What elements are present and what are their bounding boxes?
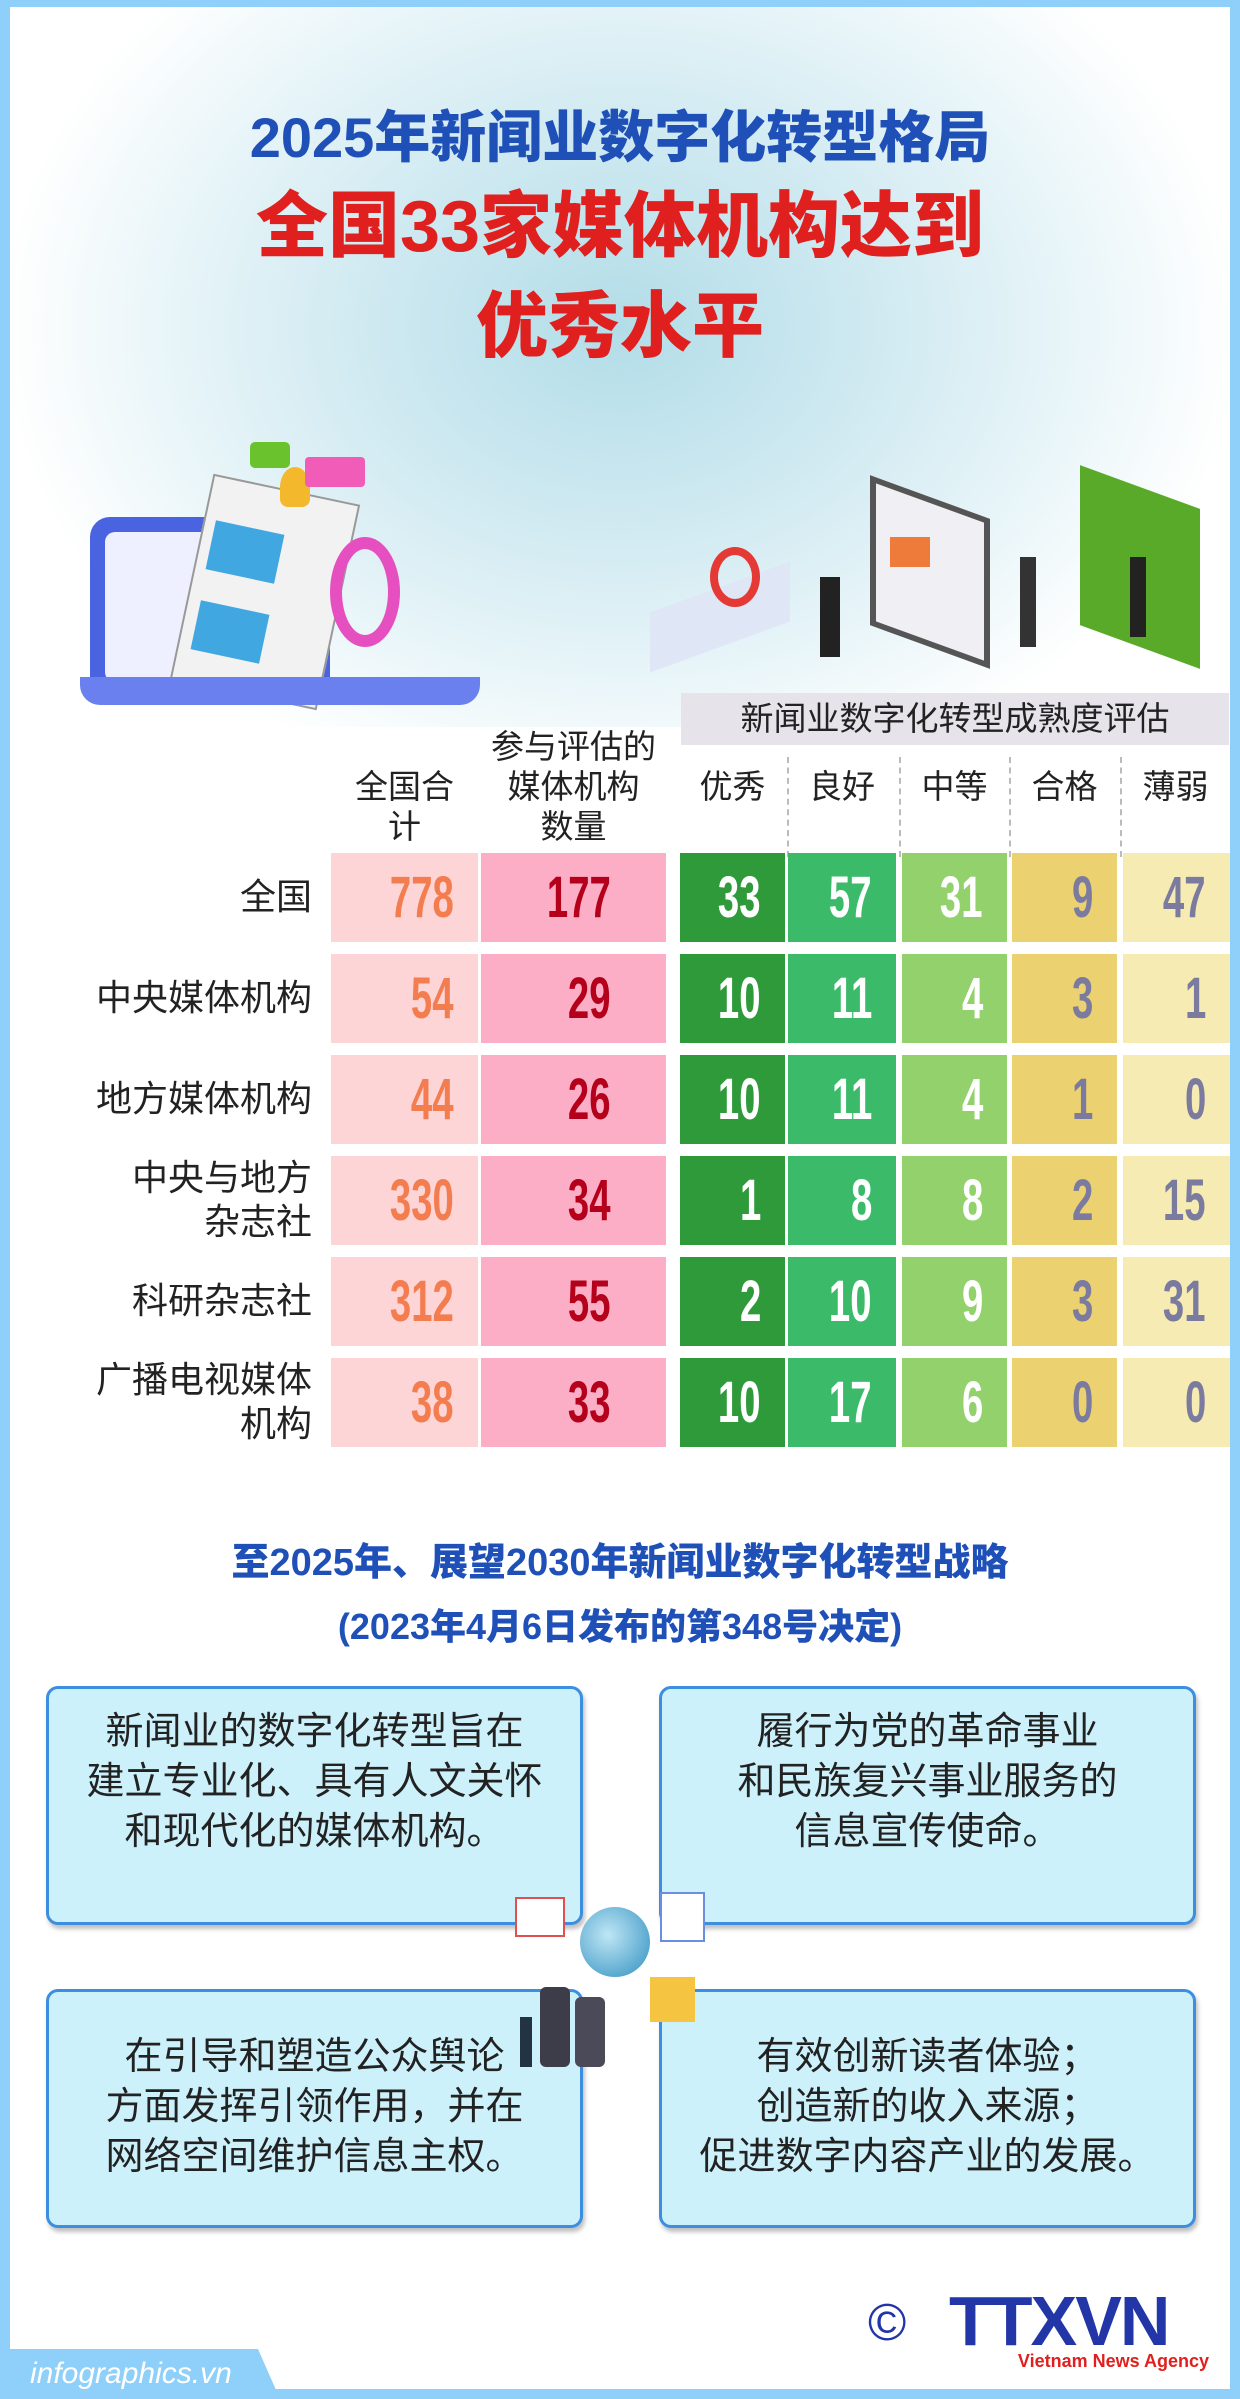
row: 广播电视媒体机构: 0 <box>1072 1370 1093 1435</box>
row: 科研杂志社: 55 <box>568 1269 611 1334</box>
column headers <box>355 728 1208 857</box>
row: 科研杂志社: 2 <box>740 1269 761 1334</box>
row: 广播电视媒体机构: 广播电视媒体 <box>96 1359 312 1400</box>
row: 中央与地方杂志社: 1 <box>740 1168 761 1233</box>
row: 广播电视媒体机构: 33 <box>568 1370 611 1435</box>
title line 2: 全国33家媒体机构达到 <box>256 187 984 267</box>
column headers: 合格 <box>1032 768 1098 805</box>
box: goal 3: 方面发挥引领作用，并在 <box>105 2086 524 2128</box>
row: 中央媒体机构: 10 <box>718 966 761 1031</box>
box: goal 4 <box>659 1989 1196 2228</box>
logo: TTXVN: Vietnam News Agency <box>1018 2351 1209 2371</box>
column headers: 优秀 <box>700 768 766 805</box>
column headers: 数量 <box>540 808 606 845</box>
title line 1: 2025年新闻业数字化转型格局 <box>250 106 990 169</box>
row: 中央与地方杂志社: 34 <box>568 1168 611 1233</box>
row: 全国: 47 <box>1163 865 1206 930</box>
box: goal 1: 和现代化的媒体机构。 <box>124 1811 504 1853</box>
column headers: 媒体机构 <box>508 768 640 805</box>
box: goal 1 <box>46 1686 583 1925</box>
box: goal 4: 促进数字内容产业的发展。 <box>699 2136 1156 2178</box>
data table <box>96 853 1230 1447</box>
row: 全国: 778 <box>390 865 454 930</box>
row: 科研杂志社 <box>132 1257 1230 1346</box>
box: goal 2: 信息宣传使命。 <box>794 1811 1060 1853</box>
row: 全国: 57 <box>829 865 872 930</box>
row: 科研杂志社: 312 <box>390 1269 454 1334</box>
row: 全国 <box>240 853 1230 942</box>
icon: digital globe and servers <box>515 1892 705 2067</box>
row: 地方媒体机构: 10 <box>718 1067 761 1132</box>
row: 广播电视媒体机构: 0 <box>1185 1370 1206 1435</box>
column headers: 良好 <box>809 768 875 805</box>
row: 地方媒体机构 <box>96 1055 1230 1144</box>
row: 全国: 177 <box>547 865 611 930</box>
row: 科研杂志社: 3 <box>1072 1269 1093 1334</box>
row: 中央媒体机构: 11 <box>832 966 872 1031</box>
row: 广播电视媒体机构: 38 <box>411 1370 454 1435</box>
row: 中央媒体机构 <box>96 954 1230 1043</box>
row: 中央媒体机构: 中央媒体机构 <box>96 977 312 1018</box>
row: 广播电视媒体机构: 17 <box>829 1370 872 1435</box>
box: goal 2: 履行为党的革命事业 <box>756 1711 1098 1753</box>
logo: copyright symbol: © <box>868 2294 906 2352</box>
column headers: 计 <box>388 808 421 845</box>
row: 广播电视媒体机构: 6 <box>962 1370 983 1435</box>
box: goal 4: 有效创新读者体验； <box>756 2036 1098 2078</box>
strategy subheading: (2023年4月6日发布的第348号决定) <box>338 1606 902 1647</box>
row: 中央与地方杂志社 <box>132 1156 1230 1245</box>
illustration: newsroom people <box>650 465 1200 672</box>
row: 中央与地方杂志社: 2 <box>1072 1168 1093 1233</box>
illustration: laptop with newspaper and megaphone <box>80 442 480 710</box>
row: 中央与地方杂志社: 中央与地方 <box>132 1157 312 1198</box>
row: 地方媒体机构: 4 <box>962 1067 983 1132</box>
row: 地方媒体机构: 1 <box>1072 1067 1093 1132</box>
row: 中央媒体机构: 29 <box>568 966 611 1031</box>
column headers: 中等 <box>922 768 988 805</box>
row: 广播电视媒体机构: 10 <box>718 1370 761 1435</box>
row: 中央与地方杂志社: 8 <box>962 1168 983 1233</box>
row: 地方媒体机构: 11 <box>832 1067 872 1132</box>
strategy heading: 至2025年、展望2030年新闻业数字化转型战略 <box>231 1542 1009 1584</box>
row: 全国: 33 <box>718 865 761 930</box>
row: 中央与地方杂志社: 8 <box>851 1168 872 1233</box>
row: 中央与地方杂志社: 330 <box>390 1168 454 1233</box>
box: goal 3: 在引导和塑造公众舆论 <box>124 2036 504 2078</box>
row: 中央媒体机构: 1 <box>1185 966 1206 1031</box>
row: 中央媒体机构: 3 <box>1072 966 1093 1031</box>
row: 地方媒体机构: 44 <box>411 1067 454 1132</box>
footer tab: infographics.vn: infographics.vn <box>30 2357 232 2390</box>
row: 科研杂志社: 31 <box>1163 1269 1206 1334</box>
row: 中央媒体机构: 54 <box>411 966 454 1031</box>
box: goal 2 <box>659 1686 1196 1925</box>
title line 3: 优秀水平 <box>476 287 764 367</box>
row: 地方媒体机构: 0 <box>1185 1067 1206 1132</box>
row: 地方媒体机构: 26 <box>568 1067 611 1132</box>
column headers: 全国合 <box>355 768 454 805</box>
row: 科研杂志社: 科研杂志社 <box>132 1280 312 1321</box>
box: goal 3 <box>46 1989 583 2228</box>
footer tab: infographics.vn <box>10 2349 276 2389</box>
column headers: 薄弱 <box>1142 768 1208 805</box>
row: 科研杂志社: 10 <box>829 1269 872 1334</box>
row: 中央与地方杂志社: 15 <box>1163 1168 1206 1233</box>
row: 科研杂志社: 9 <box>962 1269 983 1334</box>
row: 中央媒体机构: 4 <box>962 966 983 1031</box>
box: goal 2: 和民族复兴事业服务的 <box>737 1761 1118 1803</box>
row: 广播电视媒体机构: 机构 <box>240 1403 312 1444</box>
box: goal 1: 建立专业化、具有人文关怀 <box>86 1761 542 1803</box>
column headers: 参与评估的 <box>491 728 656 765</box>
box: goal 4: 创造新的收入来源； <box>756 2086 1098 2128</box>
row: 广播电视媒体机构 <box>96 1358 1230 1447</box>
box: goal 3: 网络空间维护信息主权。 <box>105 2136 524 2178</box>
row: 地方媒体机构: 地方媒体机构 <box>96 1078 312 1119</box>
row: 全国: 31 <box>940 865 983 930</box>
logo: TTXVN: TTXVN <box>949 2282 1168 2360</box>
row: 中央与地方杂志社: 杂志社 <box>204 1201 312 1242</box>
row: 全国: 全国 <box>240 876 312 917</box>
box: goal 1: 新闻业的数字化转型旨在 <box>105 1711 524 1753</box>
table header: maturity assessment: 新闻业数字化转型成熟度评估 <box>740 700 1170 737</box>
table header: maturity assessment <box>681 693 1229 745</box>
row: 全国: 9 <box>1072 865 1093 930</box>
